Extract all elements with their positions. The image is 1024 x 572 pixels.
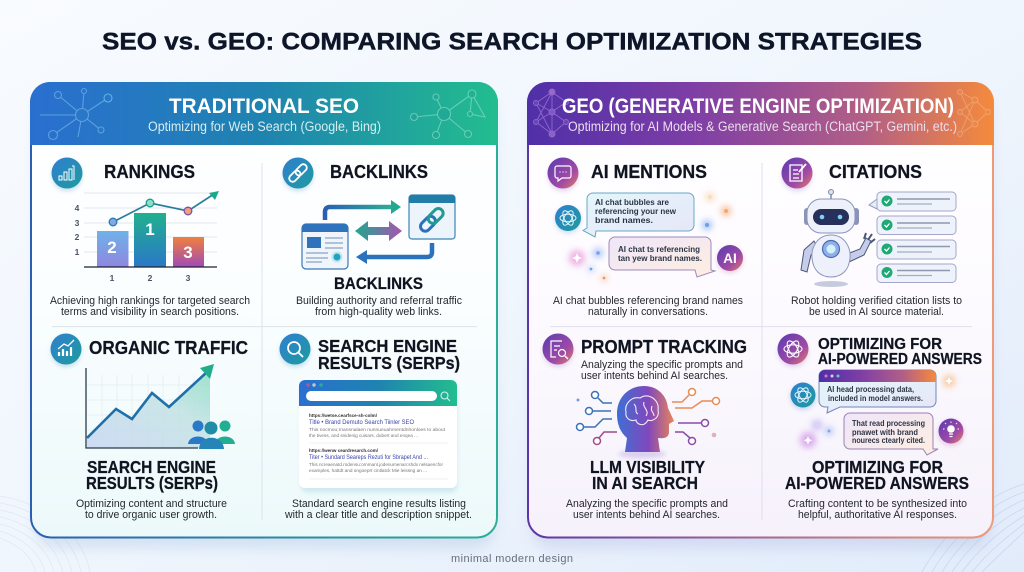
result one: This nocmou;rnansnalaen nunnueuahmentdnhonloes to about — [309, 427, 446, 433]
heading: ORGANIC TRAFFIC — [89, 338, 248, 358]
result two: Titer • Sundard Seareps Rezuti for Sbrapet And ... — [309, 454, 428, 461]
bubble two: nourecs ctearly cited. — [852, 436, 925, 445]
description: Robot holding verified citation lists to — [791, 295, 962, 307]
description: Building authority and referral traffic — [296, 295, 462, 307]
heading: AI-POWERED ANSWERS — [818, 351, 982, 368]
icon: document — [782, 158, 812, 191]
sublabel: OPTIMIZING FOR — [812, 457, 943, 477]
subheading: Optimizing for Web Search (Google, Bing) — [148, 119, 381, 134]
description: user intents behind AI searches. — [573, 509, 720, 521]
heading: RANKINGS — [104, 162, 195, 182]
icon: light bulb — [938, 418, 964, 446]
icon: AI badge: AI — [723, 251, 737, 266]
header band — [30, 82, 498, 145]
corner line pattern left — [0, 496, 90, 572]
sublabel: BACKLINKS — [334, 275, 423, 293]
description — [788, 498, 967, 521]
sublabel: SEARCH ENGINE — [87, 457, 216, 477]
bar chart: 3 — [186, 273, 191, 283]
description — [296, 295, 462, 318]
description — [284, 498, 472, 521]
bubble one: brand names. — [595, 216, 653, 225]
AI-powered answers section — [778, 334, 982, 521]
bubble one — [819, 370, 936, 413]
bar chart: 1 — [110, 273, 115, 283]
description — [76, 498, 227, 521]
icon: magnifier — [280, 334, 310, 367]
illustration: robot — [801, 190, 875, 287]
description: to drive organic user growth. — [85, 509, 217, 521]
corner line pattern right — [922, 484, 1024, 572]
description: Crafting content to be synthesized into — [788, 498, 967, 510]
icon: AI badge — [717, 245, 743, 273]
area chart — [86, 364, 214, 448]
description: from high-quality web links. — [315, 306, 442, 318]
illustration: chat bubbles — [555, 193, 743, 281]
result one: the tivess, and snidenig cuisars, dubert and enqea ... — [309, 433, 418, 439]
description — [791, 295, 962, 318]
bubble two — [609, 237, 715, 277]
title: SEO vs. GEO: COMPARING SEARCH OPTIMIZATION STRATEGIES — [102, 28, 922, 56]
sublabel — [590, 457, 705, 493]
icon: people — [188, 420, 235, 449]
icon: assistant knot — [790, 382, 816, 410]
bubble two: tan yew brand names. — [618, 254, 702, 263]
sublabel: RESULTS (SERPs) — [86, 473, 218, 493]
text block — [581, 359, 743, 382]
description: be used in AI source material. — [809, 306, 944, 318]
heading: BACKLINKS — [330, 162, 428, 182]
description — [566, 498, 728, 521]
description: Achieving high rankings for targeted search — [50, 295, 250, 307]
browser: search results — [299, 380, 457, 492]
illustration: linked pages — [302, 195, 455, 269]
icon: bars — [52, 158, 82, 191]
description: Analyzing the specific prompts and — [566, 498, 728, 510]
bar chart — [75, 191, 219, 283]
description: AI chat bubbles referencing brand names — [553, 295, 743, 307]
result two: examples, hattdt and ongoeprt cintlatck Mie leissng an ... — [309, 468, 427, 474]
illustration: answer bubbles — [790, 370, 964, 455]
sublabel: AI-POWERED ANSWERS — [785, 473, 969, 493]
footer caption: minimal modern design — [451, 553, 573, 565]
result two — [309, 448, 443, 474]
citation list — [869, 192, 956, 282]
bar chart: 2 — [107, 238, 117, 257]
result two: This ncreaenatd.rodensu:ornmant.jodenumenan:shdx nelsaencfor — [309, 462, 443, 468]
heading: GEO (GENERATIVE ENGINE OPTIMIZATION) — [562, 95, 954, 118]
icon: growth — [50, 334, 82, 367]
bubble two: AI chat ts referencing — [618, 245, 700, 254]
description — [50, 295, 250, 318]
bubble two: That read processing — [852, 419, 925, 428]
neural decoration left — [534, 89, 568, 137]
icon: assistant knot — [555, 205, 581, 233]
bar chart: 2 — [148, 273, 153, 283]
text block: user intents behind AI searches. — [581, 370, 728, 382]
heading: RESULTS (SERPs) — [318, 353, 460, 373]
bar chart: 1 — [75, 247, 80, 257]
bubble one: AI head processing data, — [827, 385, 914, 394]
description: helpful, authoritative AI responses. — [798, 509, 957, 521]
icon: link — [282, 158, 314, 191]
organic traffic section — [50, 334, 248, 521]
citations section — [782, 158, 962, 318]
description: with a clear title and description snippet. — [284, 509, 472, 521]
backlinks section — [282, 158, 462, 318]
bubble one: AI chat bubbles are — [595, 198, 670, 207]
bar chart: 4 — [75, 203, 80, 213]
bubble one — [583, 193, 694, 237]
description: terms and visibility in search positions. — [61, 306, 239, 318]
bubble two — [844, 413, 938, 455]
AI mentions section — [548, 158, 743, 318]
heading: AI MENTIONS — [591, 162, 707, 182]
result one: https://wetse.cearfsce-sh-colm/ — [309, 413, 378, 419]
header band — [527, 82, 994, 145]
illustration: brain and head — [576, 386, 720, 458]
bar chart: 1 — [145, 220, 155, 239]
network decoration right — [410, 90, 485, 138]
bubble one: included in model answers. — [828, 394, 923, 403]
description: Optimizing content and structure — [76, 498, 227, 510]
heading: CITATIONS — [829, 162, 922, 182]
SERP section — [280, 334, 472, 521]
result one — [309, 413, 446, 439]
icon: chat — [548, 158, 578, 191]
neural decoration right — [958, 90, 990, 136]
subheading: Optimizing for AI Models & Generative Search (ChatGPT, Gemini, etc.) — [568, 119, 957, 134]
result two: https://wenw ceardresarch.com/ — [309, 448, 379, 454]
heading — [318, 336, 460, 373]
text block: Analyzing the specific prompts and — [581, 359, 743, 371]
description: naturally in conversations. — [588, 306, 708, 318]
bar chart: 3 — [75, 218, 80, 228]
icon: knot — [778, 334, 808, 367]
bubble two: pnawet with brand — [852, 428, 918, 437]
panel: traditional SEO — [30, 82, 498, 548]
sublabel: IN AI SEARCH — [592, 473, 698, 493]
rankings section — [50, 158, 250, 318]
sublabel — [785, 457, 969, 493]
description — [553, 295, 743, 318]
prompt tracking section — [542, 334, 747, 521]
network decoration left — [40, 88, 112, 140]
sublabel: LLM VISIBILITY — [590, 457, 705, 477]
icon: prompt search — [542, 334, 574, 367]
bar chart: 2 — [75, 232, 80, 242]
heading: OPTIMIZING FOR — [818, 336, 942, 353]
bubble one: referencing your new — [595, 207, 677, 216]
description: Standard search engine results listing — [292, 498, 466, 510]
heading — [818, 336, 982, 368]
result one: Title • Brand Demuto Search Tiinler SEO — [309, 419, 414, 426]
heading: SEARCH ENGINE — [318, 336, 457, 356]
heading: PROMPT TRACKING — [581, 337, 747, 357]
bar chart: 3 — [183, 243, 193, 262]
panel: GEO — [527, 82, 994, 548]
heading: TRADITIONAL SEO — [169, 95, 359, 118]
sublabel — [86, 457, 218, 493]
